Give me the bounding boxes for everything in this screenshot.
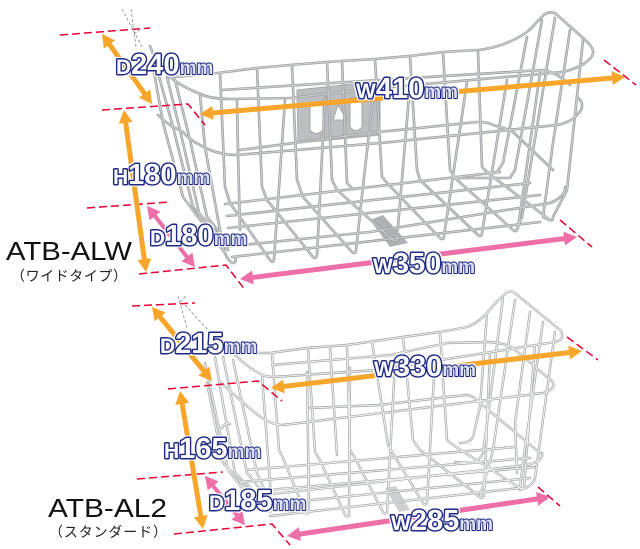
guide lines: ATB-AL2 red dashes <box>132 296 598 545</box>
label: H180mm: H180mm <box>113 159 210 191</box>
label: D240mm: D240mm <box>116 49 213 81</box>
arrow: D240 <box>104 37 150 101</box>
label: H165mm: H165mm <box>164 433 261 465</box>
arrow: W330 <box>275 352 578 388</box>
basket: ATB-AL2 wire basket photo <box>197 292 562 516</box>
label: W350mm: W350mm <box>373 248 475 280</box>
arrow: D185 <box>208 479 242 522</box>
guide lines: ATB-ALW red dashes <box>60 9 636 290</box>
label: D180mm: D180mm <box>150 220 247 252</box>
label: W330mm: W330mm <box>374 351 476 383</box>
mounting plate <box>297 81 380 143</box>
heading: ATB-AL2: ATB-AL2 <box>48 493 167 523</box>
heading: ATB-ALW: ATB-ALW <box>6 236 133 266</box>
label: W285mm: W285mm <box>391 505 493 537</box>
arrow: H165 <box>181 395 202 525</box>
arrow: W350 <box>244 238 573 278</box>
arrow: W410 <box>204 77 621 114</box>
label: W410mm: W410mm <box>356 73 458 105</box>
subheading: standard: （スタンダード） <box>49 524 167 540</box>
subheading: wide type: （ワイドタイプ） <box>11 268 127 284</box>
bottom plate <box>385 486 410 512</box>
label: D215mm: D215mm <box>160 328 257 360</box>
arrow: D215 <box>154 310 210 378</box>
arrow: D180 <box>150 209 192 264</box>
label: D185mm: D185mm <box>209 485 306 517</box>
bottom clip <box>370 215 408 247</box>
arrow: W285 <box>291 498 546 535</box>
arrow: H180 <box>124 114 146 268</box>
basket: ATB-ALW wire basket photo <box>150 12 593 263</box>
